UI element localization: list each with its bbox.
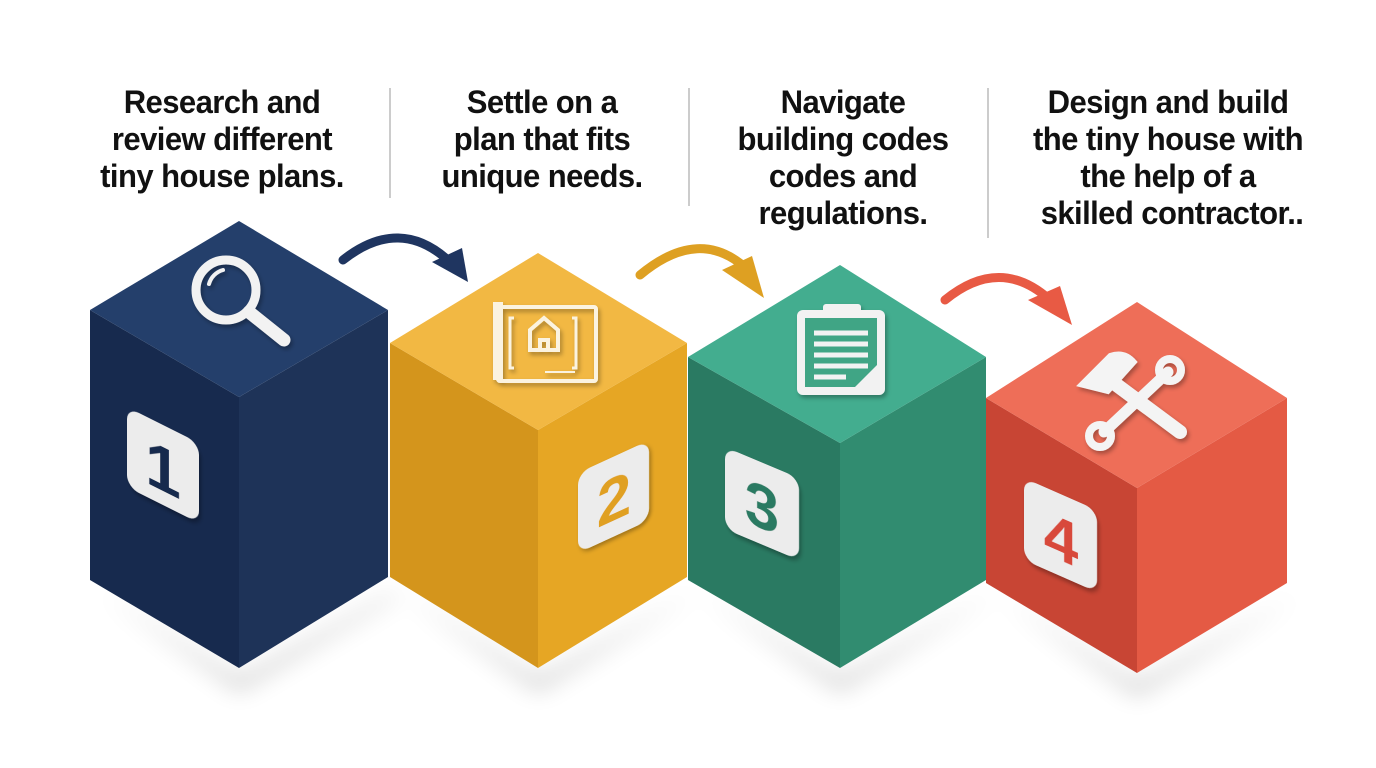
caption 3	[738, 84, 948, 231]
cube 2	[390, 253, 687, 668]
caption 3: building codes	[738, 121, 948, 157]
caption 3: regulations.	[759, 195, 927, 231]
icon: blueprint	[498, 302, 596, 381]
caption 4: the help of a	[1080, 158, 1256, 194]
tile 1: 1	[145, 426, 181, 514]
tile 4	[1024, 478, 1097, 592]
tile 4: 4	[1044, 496, 1078, 581]
tile 3: 3	[745, 465, 779, 549]
cube 3	[688, 265, 986, 668]
arrow 1	[343, 238, 468, 282]
tile 3	[725, 447, 799, 560]
caption 2: plan that fits	[454, 121, 630, 157]
caption 2: unique needs.	[441, 158, 643, 194]
caption 1: Research and	[124, 84, 320, 120]
caption 1	[100, 84, 344, 194]
caption 1: review different	[112, 121, 332, 157]
tile 2	[578, 440, 649, 553]
shadows	[100, 590, 1300, 695]
cube 4	[986, 302, 1287, 673]
icon: hammer and wrench	[1080, 354, 1181, 447]
icon: clipboard	[797, 304, 885, 395]
caption 1: tiny house plans.	[100, 158, 344, 194]
arrow 2	[640, 249, 764, 298]
caption 4: the tiny house with	[1033, 121, 1303, 157]
caption 2	[441, 84, 643, 194]
caption 4	[1033, 84, 1303, 231]
caption 3: Navigate	[781, 84, 905, 120]
caption 4: Design and build	[1048, 84, 1288, 120]
tile 1	[127, 407, 199, 523]
caption 4: skilled contractor..	[1041, 195, 1303, 231]
cube 1	[90, 221, 388, 668]
icon: magnifier	[196, 260, 284, 340]
caption 2: Settle on a	[467, 84, 617, 120]
arrow 3	[945, 278, 1072, 325]
caption 3: codes and	[769, 158, 917, 194]
tile 2: 2	[597, 456, 631, 542]
